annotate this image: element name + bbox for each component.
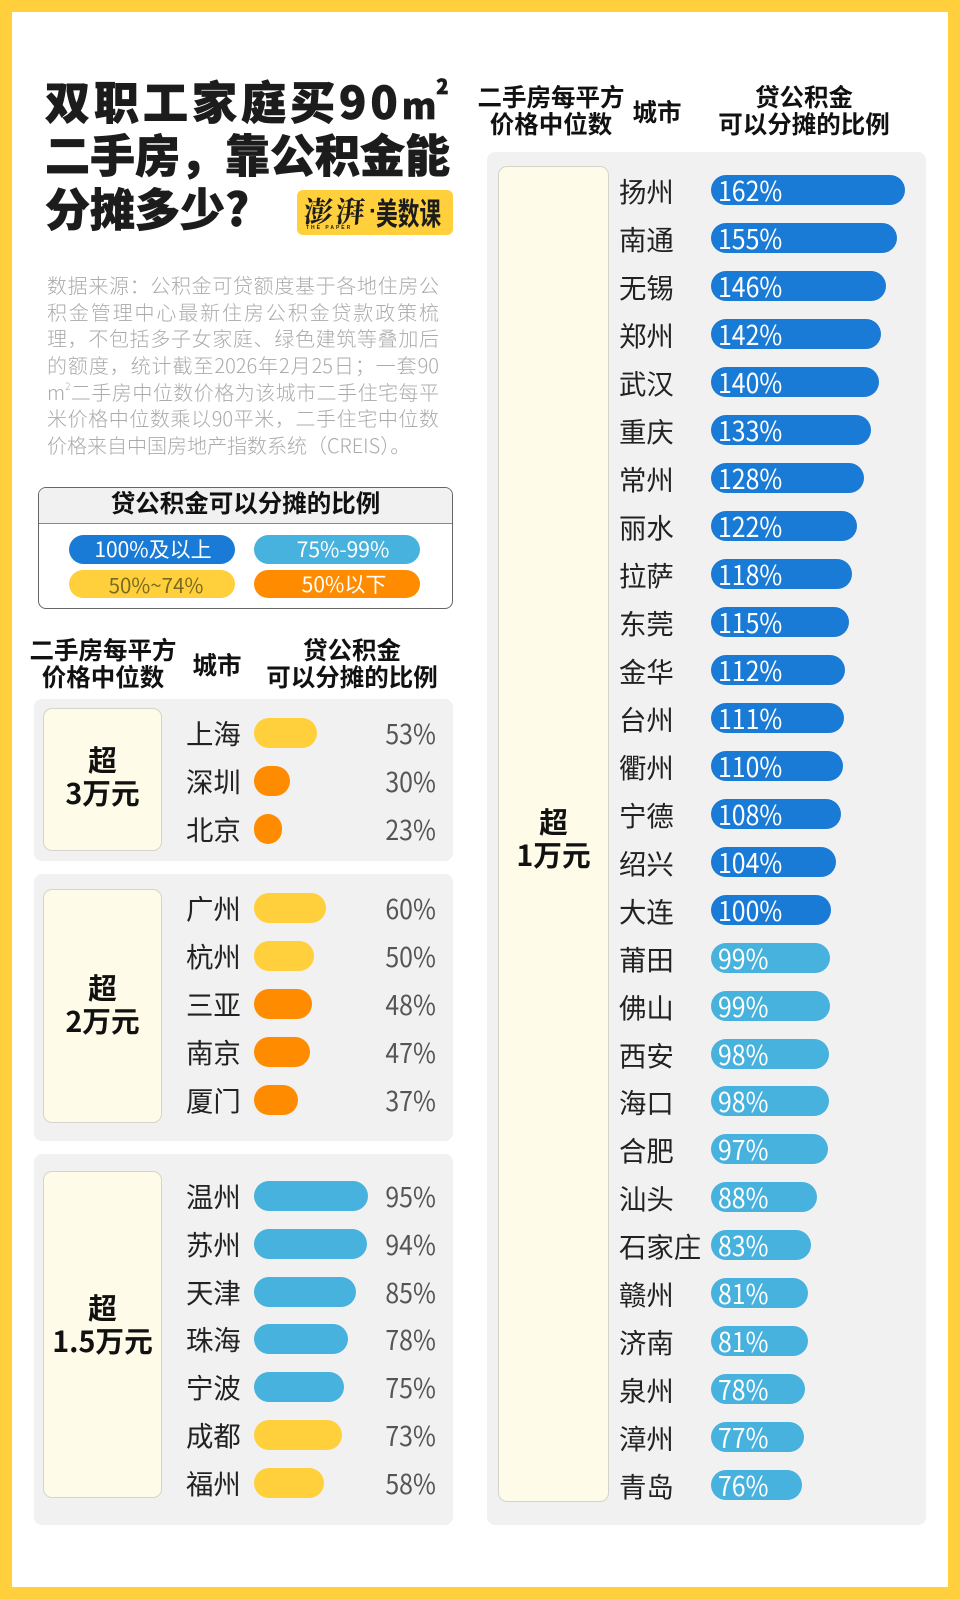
row: 南京 47% (186, 1031, 436, 1071)
data source note: m2二手房中位数价格为该城市二手住宅每平 (47, 377, 439, 406)
row: 海口 98%: 海口 (619, 1081, 674, 1121)
title (45, 67, 450, 239)
row: 三亚 48%: 48% (386, 984, 436, 1023)
logo: The Paper data class: 美数课 (376, 190, 441, 234)
row: 佛山 99% (619, 986, 830, 1026)
right column header: city: 城市 (632, 94, 682, 129)
data source note: 数据来源：公积金可贷额度基于各地住房公 (47, 270, 439, 299)
row: 扬州 162% (619, 170, 905, 210)
row: 北京 23%: 北京 (186, 808, 241, 848)
left column header: median price: 二手房每平方 (30, 632, 176, 667)
row: 苏州 94%: 苏州 (186, 1223, 241, 1263)
logo: The Paper data class: · (369, 198, 377, 225)
row: 大连 100%: 大连 (619, 890, 674, 930)
left column header: median price (30, 632, 176, 694)
row: 上海 53%: 上海 (186, 712, 241, 752)
row: 石家庄 83% (618, 1230, 908, 1260)
row: 广州 60% (186, 887, 436, 927)
row: 深圳 30% (186, 760, 436, 800)
row: 福州 58%: 福州 (186, 1462, 241, 1502)
row: 广州 60%: 广州 (186, 887, 241, 927)
row: 苏州 94% (186, 1223, 436, 1263)
row: 武汉 140%: 武汉 (619, 362, 674, 402)
right column header: median price: 二手房每平方 (478, 79, 624, 114)
row: 武汉 140%: 140% (718, 362, 782, 401)
row: 东莞 115%: 115% (718, 602, 782, 641)
logo: The Paper data class: 澎湃 (302, 190, 370, 231)
tier label: over 15000 yuan: 1.5万元 (52, 1320, 153, 1361)
row: 拉萨 118% (619, 554, 852, 594)
row: 武汉 140% (619, 362, 879, 402)
logo: The Paper data class (297, 190, 453, 235)
row: 福州 58% (186, 1462, 436, 1502)
row: 衢州 110%: 110% (718, 746, 782, 785)
row: 宁波 75% (186, 1366, 436, 1406)
data source note: 米价格中位数乘以90平米，二手住宅中位数 (47, 403, 439, 432)
data source note: 的额度，统计截至2026年2月25日；一套90 (47, 350, 439, 379)
row: 深圳 30%: 30% (386, 761, 436, 800)
row: 合肥 97% (618, 1134, 908, 1164)
row: 海口 98%: 98% (718, 1081, 768, 1120)
row: 上海 53%: 53% (386, 713, 436, 752)
row: 东莞 115% (619, 602, 849, 642)
row: 珠海 78% (186, 1318, 436, 1358)
legend: 75% to 99% (254, 535, 420, 564)
row: 绍兴 104%: 绍兴 (619, 842, 674, 882)
row: 上海 53% (186, 712, 436, 752)
row: 丽水 122%: 丽水 (619, 506, 674, 546)
row: 重庆 133%: 重庆 (619, 410, 674, 450)
row: 赣州 81%: 81% (718, 1273, 768, 1312)
row: 合肥 97%: 97% (718, 1129, 768, 1168)
row: 青岛 76%: 76% (718, 1465, 768, 1504)
row: 台州 111% (619, 698, 844, 738)
panel: over 10000 yuan (487, 152, 926, 1525)
right column header: share (718, 79, 890, 141)
row: 金华 112%: 112% (718, 650, 782, 689)
left column header: median price: 价格中位数 (42, 659, 164, 694)
row: 赣州 81% (618, 1278, 908, 1308)
row: 温州 95% (186, 1175, 436, 1215)
row: 温州 95%: 温州 (186, 1175, 241, 1215)
row: 常州 128% (619, 458, 864, 498)
row: 绍兴 104%: 104% (718, 842, 782, 881)
row: 拉萨 118%: 118% (718, 554, 782, 593)
tier label: over 30000 yuan: 3万元 (65, 772, 140, 813)
row: 广州 60%: 60% (386, 888, 436, 927)
right column header: share: 可以分摊的比例 (718, 106, 890, 141)
row: 西安 98% (619, 1034, 829, 1074)
left column header: share: 贷公积金 (303, 632, 401, 667)
row: 郑州 142%: 郑州 (619, 314, 674, 354)
row: 金华 112% (619, 650, 845, 690)
legend: below 50% (254, 570, 420, 598)
right column header: share: 贷公积金 (755, 79, 853, 114)
row: 深圳 30%: 深圳 (186, 760, 241, 800)
logo: The Paper data class: THE PAPER (306, 225, 352, 231)
tier label: over 15000 yuan: 超 (88, 1287, 117, 1328)
row: 海口 98% (618, 1086, 908, 1116)
row: 莆田 99%: 莆田 (619, 938, 674, 978)
row: 丽水 122% (619, 506, 857, 546)
row: 成都 73%: 73% (386, 1415, 436, 1454)
legend heading (39, 488, 452, 524)
left column header: share: 可以分摊的比例 (266, 659, 438, 694)
right column header: median price: 价格中位数 (490, 106, 612, 141)
row: 南通 155%: 155% (718, 218, 782, 257)
row: 厦门 37% (186, 1079, 436, 1119)
legend: 50% to 74%: 50%~74% (109, 569, 203, 599)
row: 佛山 99%: 99% (718, 986, 768, 1025)
row: 济南 81%: 81% (718, 1321, 768, 1360)
row: 石家庄 83%: 83% (718, 1225, 768, 1264)
row: 无锡 146% (619, 266, 886, 306)
right column header: median price (478, 79, 624, 141)
legend: 75% to 99%: 75%-99% (297, 534, 389, 564)
tier label: over 20000 yuan: 超 (88, 967, 117, 1008)
row: 青岛 76% (618, 1470, 908, 1500)
row: 郑州 142%: 142% (718, 314, 782, 353)
row: 郑州 142% (619, 314, 881, 354)
tier label: over 10000 yuan: 1万元 (516, 834, 591, 875)
title: 二手房，靠公积金能 (45, 120, 450, 185)
row: 三亚 48% (186, 983, 436, 1023)
row: 大连 100% (619, 890, 831, 930)
left column header: city: 城市 (192, 647, 242, 682)
row: 漳州 77%: 漳州 (619, 1417, 674, 1457)
legend: 100% and above: 100%及以上 (94, 534, 212, 564)
tier label: over 20000 yuan: 2万元 (65, 1000, 140, 1041)
row: 汕头 88%: 88% (718, 1177, 768, 1216)
row: 汕头 88% (618, 1182, 908, 1212)
row: 宁波 75%: 75% (386, 1367, 436, 1406)
row: 三亚 48%: 三亚 (186, 983, 241, 1023)
tier label: over 30000 yuan (43, 708, 162, 851)
row: 西安 98%: 98% (718, 1034, 768, 1073)
row: 绍兴 104% (619, 842, 836, 882)
tier label: over 15000 yuan (43, 1171, 162, 1498)
row: 衢州 110%: 衢州 (619, 746, 674, 786)
row: 北京 23% (186, 808, 436, 848)
row: 扬州 162%: 扬州 (619, 170, 674, 210)
row: 丽水 122%: 122% (718, 506, 782, 545)
row: 泉州 78% (618, 1374, 908, 1404)
row: 珠海 78%: 珠海 (186, 1318, 241, 1358)
row: 赣州 81%: 赣州 (619, 1273, 674, 1313)
row: 台州 111%: 111% (718, 698, 782, 737)
row: 台州 111%: 台州 (619, 698, 674, 738)
legend: 100% and above (69, 535, 235, 564)
row: 常州 128%: 128% (718, 458, 782, 497)
row: 南京 47%: 南京 (186, 1031, 241, 1071)
row: 扬州 162%: 162% (718, 170, 782, 209)
row: 天津 85%: 85% (386, 1272, 436, 1311)
row: 天津 85%: 天津 (186, 1271, 241, 1311)
left column header: share (266, 632, 438, 694)
row: 杭州 50% (186, 935, 436, 975)
row: 漳州 77%: 77% (718, 1417, 768, 1456)
row: 重庆 133% (619, 410, 871, 450)
row: 成都 73%: 成都 (186, 1414, 241, 1454)
tier label: over 10000 yuan: 超 (539, 801, 568, 842)
row: 无锡 146%: 146% (718, 266, 782, 305)
tier label: over 30000 yuan: 超 (88, 739, 117, 780)
row: 拉萨 118%: 拉萨 (619, 554, 674, 594)
legend: below 50%: 50%以下 (302, 569, 386, 599)
title: 分摊多少? (45, 174, 249, 239)
row: 泉州 78%: 78% (718, 1369, 768, 1408)
row: 宁德 108%: 宁德 (619, 794, 674, 834)
row: 成都 73% (186, 1414, 436, 1454)
row: 厦门 37%: 37% (386, 1080, 436, 1119)
row: 宁德 108% (619, 794, 841, 834)
row: 大连 100%: 100% (718, 890, 782, 929)
row: 汕头 88%: 汕头 (619, 1177, 674, 1217)
row: 济南 81% (618, 1326, 908, 1356)
row: 泉州 78%: 泉州 (619, 1369, 674, 1409)
data source note: 价格来自中国房地产指数系统（CREIS）。 (47, 430, 410, 459)
row: 金华 112%: 金华 (619, 650, 674, 690)
row: 莆田 99%: 99% (718, 938, 768, 977)
row: 青岛 76%: 青岛 (619, 1465, 674, 1505)
row: 无锡 146%: 无锡 (619, 266, 674, 306)
legend (38, 487, 453, 609)
tier label: over 10000 yuan (498, 166, 609, 1502)
row: 石家庄 83%: 石家庄 (619, 1225, 701, 1265)
legend: 50% to 74% (69, 570, 235, 598)
row: 漳州 77% (618, 1422, 908, 1452)
panel: over 30000 yuan (34, 699, 453, 861)
row: 苏州 94%: 94% (386, 1224, 436, 1263)
data source note (47, 270, 439, 459)
row: 温州 95%: 95% (386, 1176, 436, 1215)
row: 福州 58%: 58% (386, 1463, 436, 1502)
row: 宁德 108%: 108% (718, 794, 782, 833)
row: 厦门 37%: 厦门 (186, 1079, 241, 1119)
row: 重庆 133%: 133% (718, 410, 782, 449)
data source note: 理，不包括多子女家庭、绿色建筑等叠加后 (47, 323, 439, 352)
row: 合肥 97%: 合肥 (619, 1129, 674, 1169)
tier label: over 20000 yuan (43, 889, 162, 1123)
row: 天津 85% (186, 1271, 436, 1311)
panel: over 20000 yuan (34, 874, 453, 1141)
panel: over 15000 yuan (34, 1154, 453, 1525)
row: 珠海 78%: 78% (386, 1319, 436, 1358)
row: 济南 81%: 济南 (619, 1321, 674, 1361)
row: 南通 155% (619, 218, 897, 258)
row: 宁波 75%: 宁波 (186, 1366, 241, 1406)
row: 常州 128%: 常州 (619, 458, 674, 498)
row: 佛山 99%: 佛山 (619, 986, 674, 1026)
row: 北京 23%: 23% (386, 809, 436, 848)
row: 衢州 110% (619, 746, 843, 786)
row: 西安 98%: 西安 (619, 1034, 674, 1074)
row: 杭州 50%: 50% (386, 936, 436, 975)
row: 东莞 115%: 东莞 (619, 602, 674, 642)
title: 双职工家庭买90m2 (45, 67, 448, 132)
row: 莆田 99% (619, 938, 830, 978)
row: 南通 155%: 南通 (619, 218, 674, 258)
row: 南京 47%: 47% (386, 1032, 436, 1071)
data source note: 积金管理中心最新住房公积金贷款政策梳 (47, 297, 439, 326)
row: 杭州 50%: 杭州 (186, 935, 241, 975)
